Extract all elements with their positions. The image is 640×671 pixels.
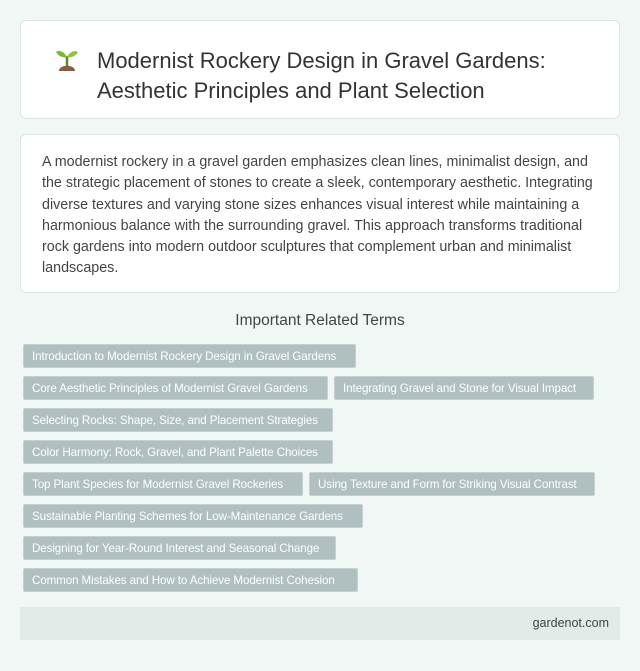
title: Aesthetic Principles and Plant Selection bbox=[97, 78, 485, 103]
tag 4 bbox=[23, 408, 333, 432]
tag 2 bbox=[23, 376, 328, 400]
tag 9 bbox=[23, 536, 336, 560]
footer bbox=[20, 607, 620, 640]
tag 8 bbox=[23, 504, 363, 528]
description text: diverse textures and varying stone sizes enhances visual interest while maintaining a bbox=[42, 197, 579, 213]
tag 1: Introduction to Modernist Rockery Design in Gravel Gardens bbox=[32, 350, 336, 363]
tag 2: Core Aesthetic Principles of Modernist Gravel Gardens bbox=[32, 382, 308, 395]
tag 8: Sustainable Planting Schemes for Low-Maintenance Gardens bbox=[32, 510, 343, 523]
tag 5 bbox=[23, 440, 333, 464]
tag 7 bbox=[309, 472, 595, 496]
tag 3: Integrating Gravel and Stone for Visual Impact bbox=[343, 382, 576, 395]
header card bbox=[20, 20, 620, 119]
description text: landscapes. bbox=[42, 260, 118, 276]
title bbox=[97, 48, 546, 103]
icon: seedling bbox=[56, 50, 78, 71]
tag 1 bbox=[23, 344, 356, 368]
tag 6: Top Plant Species for Modernist Gravel Rockeries bbox=[32, 478, 283, 491]
description text: rock gardens into modern outdoor sculptures that complement urban and minimalist bbox=[42, 239, 571, 255]
section heading: Important Related Terms bbox=[235, 312, 405, 329]
tag 7: Using Texture and Form for Striking Visual Contrast bbox=[318, 478, 577, 491]
description text: A modernist rockery in a gravel garden emphasizes clean lines, minimalist design, and bbox=[42, 154, 588, 170]
title: Modernist Rockery Design in Gravel Gardens: bbox=[97, 48, 546, 73]
tag 10: Common Mistakes and How to Achieve Modernist Cohesion bbox=[32, 574, 335, 587]
tag 4: Selecting Rocks: Shape, Size, and Placement Strategies bbox=[32, 414, 318, 427]
description text bbox=[42, 154, 593, 276]
description text: the strategic placement of stones to create a sleek, contemporary aesthetic. Integrating bbox=[42, 175, 593, 191]
description card bbox=[20, 134, 620, 293]
tag 6 bbox=[23, 472, 303, 496]
footer text: gardenot.com bbox=[533, 616, 609, 630]
tag 3 bbox=[334, 376, 594, 400]
tag 5: Color Harmony: Rock, Gravel, and Plant Palette Choices bbox=[32, 446, 318, 459]
description text: harmonious balance with the surrounding gravel. This approach transforms traditional bbox=[42, 218, 582, 234]
tag 9: Designing for Year-Round Interest and Seasonal Change bbox=[32, 542, 319, 555]
tag 10 bbox=[23, 568, 358, 592]
